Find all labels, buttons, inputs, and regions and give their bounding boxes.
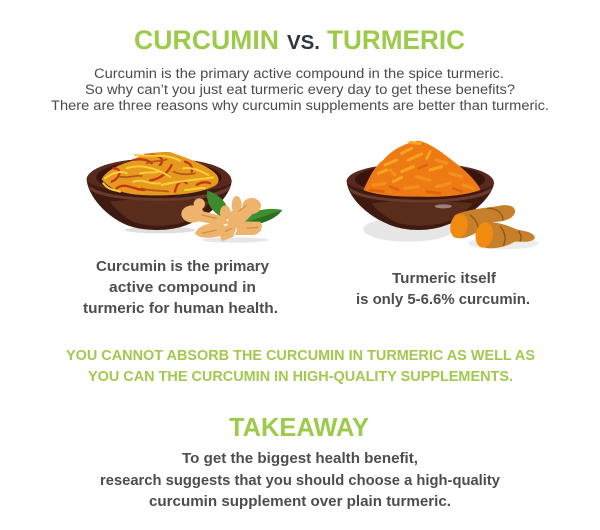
title: TURMERIC <box>327 25 465 55</box>
caption: turmeric: is only 5-6.6% curcumin. <box>356 292 530 308</box>
title: VS. <box>287 31 320 54</box>
caption: curcumin: active compound in <box>109 280 256 296</box>
callout <box>66 348 535 385</box>
intro text: There are three reasons why curcumin supplements are better than turmeric. <box>51 98 549 113</box>
title <box>134 25 465 55</box>
callout: YOU CANNOT ABSORB THE CURCUMIN IN TURMERIC AS WELL AS <box>66 348 535 364</box>
takeaway text: curcumin supplement over plain turmeric. <box>149 494 451 510</box>
intro text: So why can’t you just eat turmeric every day to get these benefits? <box>85 82 515 97</box>
takeaway text: research suggests that you should choose a high-quality <box>100 473 500 489</box>
roots <box>452 205 515 238</box>
callout: YOU CAN THE CURCUMIN IN HIGH-QUALITY SUPPLEMENTS. <box>88 369 513 385</box>
takeaway text: To get the biggest health benefit, <box>182 451 418 467</box>
intro text: Curcumin is the primary active compound in the spice turmeric. <box>94 66 504 81</box>
intro text <box>51 66 549 113</box>
icon: curcumin bowl with turmeric root <box>87 152 282 243</box>
caption: curcumin: Curcumin is the primary <box>96 259 269 275</box>
takeaway text <box>100 451 500 510</box>
icon: turmeric powder bowl with roots <box>347 141 538 249</box>
caption: turmeric: Turmeric itself <box>392 271 496 287</box>
caption: curcumin <box>83 259 278 317</box>
turmeric root <box>181 196 262 242</box>
caption: curcumin: turmeric for human health. <box>83 301 278 317</box>
title: CURCUMIN <box>134 25 279 55</box>
caption: turmeric <box>356 271 530 308</box>
heading: takeaway: TAKEAWAY <box>229 412 369 442</box>
leaves <box>207 191 228 219</box>
